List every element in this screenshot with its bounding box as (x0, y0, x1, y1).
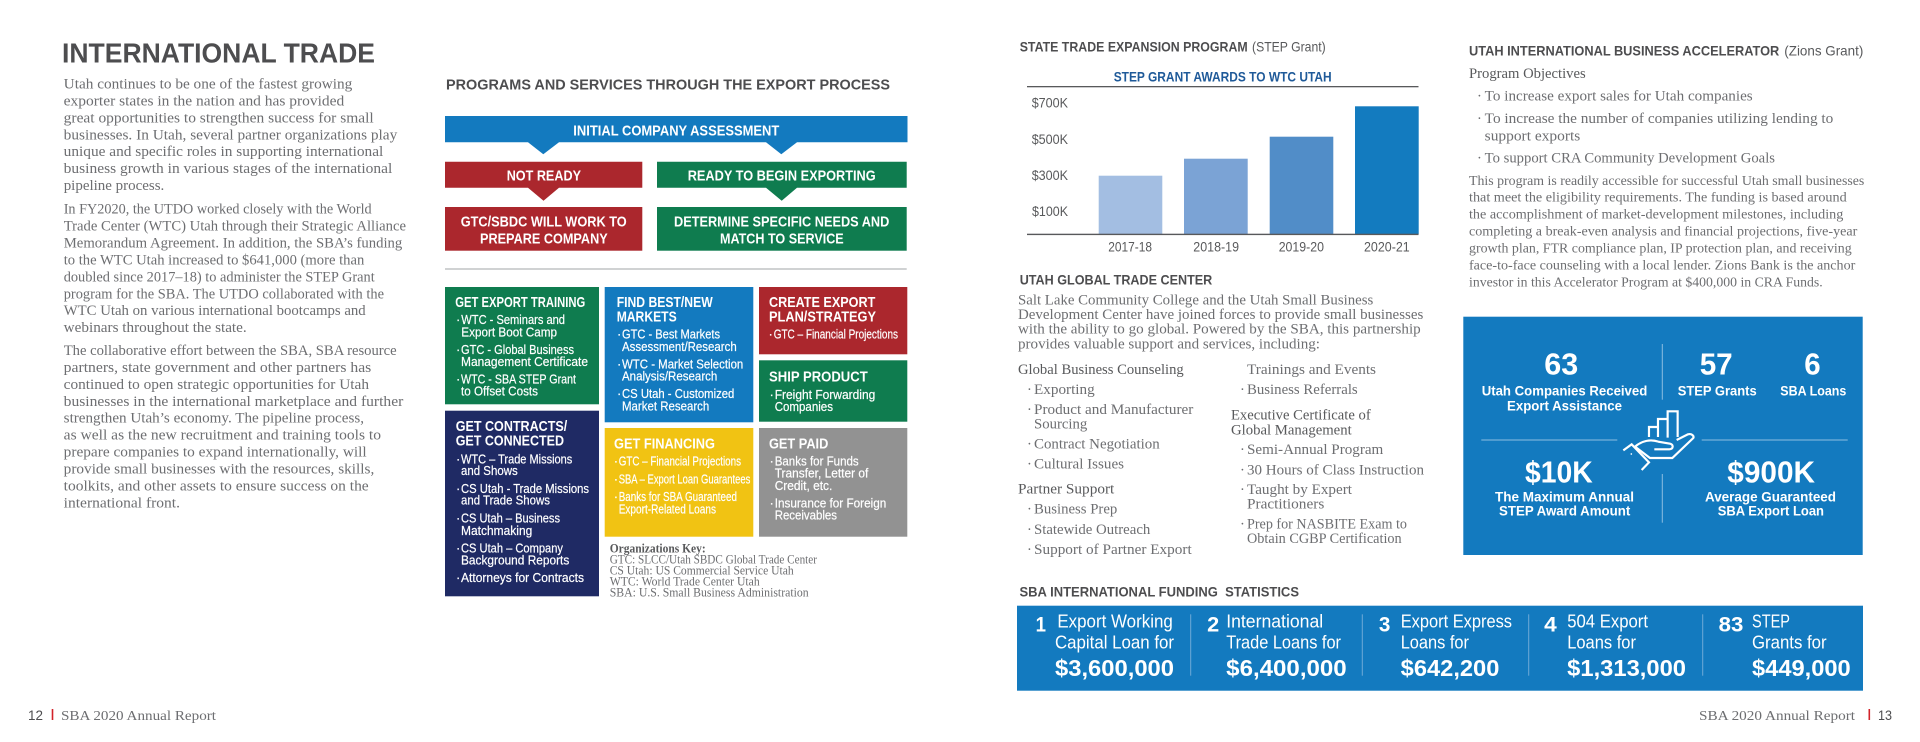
text block: accelerator program description: This program is readily accessible for successful Utah small businesses (1469, 174, 1864, 189)
heading: Utah international business accelerator: UTAH INTERNATIONAL BUSINESS ACCELERATOR (1469, 42, 1779, 58)
panel: get paid: Banks for Funds (775, 454, 859, 469)
list: global business counseling and partner support: · (1027, 542, 1032, 558)
legend: organizations key: CS Utah: US Commercial Service Utah (610, 564, 794, 578)
panel: get contracts / get connected: Attorneys for Contracts (461, 570, 584, 585)
stat: 504 export loans: $1,313,000 (1567, 655, 1686, 681)
panel: ship product (759, 360, 907, 422)
heading: SBA international funding statistics: SBA INTERNATIONAL FUNDING STATISTICS (1020, 584, 1299, 600)
flow step: determine specific needs: DETERMINE SPECIFIC NEEDS AND (674, 214, 889, 231)
stat: international trade loans: 2 (1207, 614, 1219, 637)
stat: 57 STEP grants: 57 (1700, 346, 1733, 381)
footer: left page number: 12 (28, 707, 43, 723)
text block: accelerator program description: face-to-face counseling with a local lender. Zions Bank is the anchor (1469, 259, 1856, 274)
heading: programs and services: PROGRAMS AND SERVICES THROUGH THE EXPORT PROCESS (446, 76, 890, 93)
panel: get contracts / get connected: Background Reports (461, 553, 570, 568)
y axis labels: $300K (1032, 167, 1069, 183)
text block: Utah global trade center intro: with the ability to go global. Powered by the SBA, this partnership (1018, 322, 1421, 338)
y axis labels (1032, 95, 1069, 219)
y axis labels: $500K (1032, 131, 1069, 147)
stat: $900K average loan (1705, 454, 1836, 519)
heading: state trade expansion program: STATE TRADE EXPANSION PROGRAM (1020, 39, 1248, 55)
stat: export working capital loan: $3,600,000 (1055, 655, 1174, 681)
panel: find best/new markets: FIND BEST/NEW (617, 294, 713, 311)
list: trainings and executive certificate (1231, 362, 1425, 547)
panel: create export plan/strategy: PLAN/STRATEGY (769, 309, 876, 326)
panel: get contracts / get connected: CS Utah - Trade Missions (461, 481, 589, 496)
text block: introduction (64, 76, 406, 511)
text block: accelerator program description: completing a break-even analysis and financial projections, five-year (1469, 225, 1858, 240)
panel: find best/new markets: · (617, 386, 621, 401)
text block: introduction: partners, state government and other partners has (64, 360, 371, 376)
panel: get export training: · (456, 372, 460, 387)
stat: 6 SBA loans: SBA Loans (1780, 383, 1846, 399)
text block: Utah global trade center intro: provides valuable support and services, including: (1018, 336, 1320, 352)
stat: export working capital loan: Capital Loan for (1055, 632, 1174, 652)
heading: Utah international business accelerator: (Zions Grant) (1784, 42, 1863, 58)
list: global business counseling and partner support: Partner Support (1018, 482, 1114, 498)
list: trainings and executive certificate: · (1240, 482, 1245, 498)
stat: export working capital loan (1036, 612, 1174, 681)
y axis labels: $700K (1032, 95, 1069, 111)
stat: STEP grants: Grants for (1752, 632, 1827, 652)
stat: $900K average loan: SBA Export Loan (1718, 503, 1824, 519)
panel: get contracts / get connected: · (456, 540, 460, 555)
stat: 57 STEP grants (1678, 346, 1757, 399)
list: trainings and executive certificate: Practitioners (1247, 497, 1325, 513)
text block: introduction: exporter states in the nation and has provided (64, 94, 345, 110)
icon: hand holding bar chart (1623, 411, 1694, 470)
stat: international trade loans: International (1226, 612, 1323, 632)
panel: find best/new markets: CS Utah - Customized (622, 386, 734, 401)
flow step: determine specific needs: MATCH TO SERVICE (720, 231, 844, 248)
stat: international trade loans (1207, 612, 1347, 681)
list: global business counseling and partner support: Cultural Issues (1034, 456, 1124, 472)
text block: introduction: strengthen Utah’s economy. The pipeline process, (64, 411, 364, 427)
list: trainings and executive certificate: Business Referrals (1247, 382, 1358, 398)
panel: find best/new markets: MARKETS (617, 309, 677, 326)
text block: accelerator program description (1469, 174, 1864, 291)
footer: left page number: SBA 2020 Annual Report (61, 709, 216, 724)
flow step: ready to begin exporting: READY TO BEGIN EXPORTING (688, 168, 876, 185)
chart title: STEP GRANT AWARDS TO WTC UTAH (1114, 69, 1332, 85)
list: global business counseling and partner support: · (1027, 456, 1032, 472)
stat: $900K average loan: $900K (1727, 454, 1816, 489)
panel: create export plan/strategy: CREATE EXPORT (769, 294, 875, 311)
panel: get financing: · (614, 489, 618, 504)
panel: get paid: Receivables (775, 508, 837, 523)
stat: export express loans: Loans for (1401, 632, 1469, 652)
list: global business counseling and partner support: · (1027, 402, 1032, 418)
list: trainings and executive certificate: Semi-Annual Program (1247, 442, 1384, 458)
flow step: not ready (445, 162, 642, 201)
x axis labels: 2017-18 (1108, 239, 1152, 255)
stat: international trade loans: Trade Loans for (1226, 632, 1341, 652)
text block: accelerator program description: the accomplishment of market-development milestones, including (1469, 208, 1843, 223)
panel: get export training: GET EXPORT TRAINING (455, 294, 585, 311)
panel: get contracts / get connected: · (456, 570, 460, 585)
panel: get export training: WTC - Seminars and (461, 312, 565, 327)
text block: Utah global trade center intro: Salt Lake Community College and the Utah Small Business (1018, 292, 1374, 308)
panel: get financing: Banks for SBA Guaranteed (619, 489, 737, 504)
list: trainings and executive certificate: Executive Certificate of (1231, 408, 1371, 424)
text block: introduction: prepare companies to expand internationally, will (64, 445, 367, 461)
panel: get financing: GTC – Financial Projections (619, 454, 741, 469)
list: program objectives: To increase the number of companies utilizing lending to (1485, 111, 1833, 127)
panel: create export plan/strategy: GTC – Financial Projections (774, 327, 898, 342)
panel: get financing: SBA – Export Loan Guarantees (619, 472, 751, 487)
list: global business counseling and partner support: · (1027, 502, 1032, 518)
list: trainings and executive certificate: Taught by Expert (1247, 482, 1352, 498)
stat: 6 SBA loans (1780, 346, 1846, 399)
panel: get export training: · (456, 342, 460, 357)
text block: introduction: The collaborative effort between the SBA, SBA resource (64, 343, 397, 359)
stat: STEP grants (1719, 612, 1851, 681)
text block: introduction: doubled since 2017–18) to administer the STEP Grant (64, 269, 375, 285)
x axis labels (1108, 239, 1410, 255)
stat: 504 export loans (1544, 612, 1686, 681)
flow step: ready to begin exporting (657, 162, 907, 201)
text block: introduction: businesses in the international marketplace and further (64, 394, 403, 410)
stat: export express loans: 3 (1379, 614, 1390, 637)
panel: find best/new markets: · (617, 356, 621, 371)
panel: get export training: Export Boot Camp (461, 325, 557, 340)
panel: get financing: Export-Related Loans (619, 501, 716, 516)
list: global business counseling and partner support: Product and Manufacturer (1034, 402, 1193, 418)
list: trainings and executive certificate: · (1240, 462, 1245, 478)
panel: get contracts / get connected: CS Utah – Company (461, 540, 563, 555)
list: program objectives: Program Objectives (1469, 66, 1586, 82)
stat: export working capital loan: Export Working (1057, 612, 1173, 632)
panel: get contracts / get connected: CS Utah – Business (461, 511, 560, 526)
list: program objectives: support exports (1485, 128, 1581, 144)
x axis labels: 2020-21 (1364, 239, 1410, 255)
legend: organizations key: SBA: U.S. Small Business Administration (610, 585, 809, 599)
panel: ship product: Companies (775, 399, 833, 414)
flow step: initial company assessment (445, 116, 908, 154)
stat: 63 companies: Export Assistance (1507, 397, 1622, 413)
flow step: GTC/SBDC will work to prepare company (445, 207, 642, 251)
list: trainings and executive certificate: Prep for NASBITE Exam to (1247, 516, 1407, 532)
x axis labels: 2019-20 (1279, 239, 1324, 255)
stat: STEP grants: STEP (1752, 612, 1790, 632)
list: trainings and executive certificate: · (1240, 442, 1245, 458)
panel: find best/new markets: Analysis/Research (622, 369, 717, 384)
x axis labels: 2018-19 (1193, 239, 1239, 255)
panel: find best/new markets: WTC - Market Selection (622, 356, 743, 371)
footer: right page number: SBA 2020 Annual Report (1699, 709, 1855, 724)
panel: get paid: · (770, 496, 774, 511)
panel: find best/new markets: · (617, 327, 621, 342)
flow step: GTC/SBDC will work to prepare company: GTC/SBDC WILL WORK TO (461, 214, 627, 231)
legend: organizations key (610, 542, 818, 599)
panel: get contracts / get connected: · (456, 451, 460, 466)
panel: get contracts / get connected: · (456, 481, 460, 496)
stat: 63 companies: 63 (1544, 346, 1578, 381)
panel: get financing: GET FINANCING (614, 435, 715, 452)
panel: get export training: WTC - SBA STEP Grant (461, 372, 576, 387)
list: program objectives: · (1477, 151, 1482, 167)
stat: 63 companies: Utah Companies Received (1482, 383, 1647, 399)
panel: get paid: GET PAID (769, 435, 828, 452)
panel: find best/new markets: Assessment/Research (622, 339, 737, 354)
text block: introduction: WTC Utah on various international bootcamps and (64, 303, 366, 319)
list: trainings and executive certificate: Trainings and Events (1247, 362, 1376, 378)
stat: $10K maximum award (1495, 454, 1634, 519)
list: global business counseling and partner support: · (1027, 382, 1032, 398)
text block: accelerator program description: growth plan, FTR compliance plan, IP protection plan, and receiving (1469, 242, 1852, 257)
panel: create export plan/strategy: · (768, 327, 773, 342)
stat: export express loans: Export Express (1401, 612, 1512, 632)
text block: introduction: pipeline process. (64, 178, 164, 194)
bar chart: STEP grant awards to WTC Utah (1027, 69, 1419, 255)
panel: get export training: Management Certificate (461, 354, 588, 369)
footer: right page number (1699, 707, 1892, 724)
list: trainings and executive certificate: Obtain CGBP Certification (1247, 531, 1402, 547)
list: program objectives (1469, 66, 1833, 167)
list: global business counseling and partner support: Support of Partner Export (1034, 542, 1192, 558)
stat: $10K maximum award: STEP Award Amount (1499, 503, 1631, 519)
legend: organizations key: WTC: World Trade Center Utah (610, 574, 760, 588)
footer: right page number: 13 (1878, 707, 1892, 723)
panel: get paid: · (770, 454, 774, 469)
panel: get paid: Insurance for Foreign (775, 496, 886, 511)
flow step: initial company assessment: INITIAL COMPANY ASSESSMENT (573, 123, 779, 140)
panel: get export training: to Offset Costs (461, 384, 538, 399)
list: global business counseling and partner support: Global Business Counseling (1018, 362, 1184, 378)
panel: get paid: Transfer, Letter of (775, 466, 869, 481)
text block: introduction: Trade Center (WTC) Utah through their Strategic Alliance (64, 218, 406, 234)
text block: introduction: great opportunities to strengthen success for small (64, 110, 374, 126)
list: global business counseling and partner support: Business Prep (1034, 502, 1117, 518)
panel: get financing (605, 428, 753, 537)
heading: Utah global trade center: UTAH GLOBAL TRADE CENTER (1020, 272, 1212, 288)
list: global business counseling and partner support (1018, 362, 1193, 558)
text block: introduction: international front. (64, 495, 180, 511)
text block: introduction: business growth in various stages of the international (64, 161, 392, 177)
stat: international trade loans: $6,400,000 (1226, 655, 1347, 681)
panel: get contracts / get connected: Matchmaking (461, 523, 532, 538)
stat: STEP grants: 83 (1719, 614, 1743, 637)
text block: accelerator program description: investor in this Accelerator Program at $400,000 in CRA Funds. (1469, 276, 1823, 291)
stat: 504 export loans: 4 (1544, 614, 1557, 637)
flow step: GTC/SBDC will work to prepare company: PREPARE COMPANY (480, 231, 608, 248)
title: INTERNATIONAL TRADE (62, 38, 375, 68)
list: trainings and executive certificate: Global Management (1231, 422, 1352, 438)
flow step: determine specific needs (657, 207, 907, 251)
list: global business counseling and partner support: Exporting (1034, 382, 1095, 398)
text block: introduction: as well as the new recruitment and training tools to (64, 428, 381, 444)
text block: introduction: webinars throughout the state. (64, 320, 247, 336)
panel: get contracts / get connected: GET CONNECTED (456, 432, 564, 449)
stat: $10K maximum award: The Maximum Annual (1495, 489, 1634, 505)
list: trainings and executive certificate: · (1240, 382, 1245, 398)
flow step: not ready: NOT READY (507, 168, 581, 185)
text block: introduction: Memorandum Agreement. In addition, the SBA’s funding (64, 235, 403, 251)
panel: get export training: · (456, 312, 460, 327)
stat: export express loans (1379, 612, 1512, 681)
text block: introduction: unique and specific roles in supporting international (64, 144, 383, 160)
panel: get contracts / get connected (445, 411, 599, 596)
text block: introduction: program for the SBA. The UTDO collaborated with the (64, 286, 384, 302)
panel: find best/new markets: GTC - Best Markets (622, 327, 720, 342)
list: program objectives: · (1477, 89, 1482, 105)
stat: $900K average loan: Average Guaranteed (1705, 489, 1836, 505)
list: trainings and executive certificate: · (1240, 516, 1245, 532)
text block: introduction: toolkits, and other assets to ensure success on the (64, 478, 369, 494)
stat: STEP grants: $449,000 (1752, 655, 1851, 681)
panel: get contracts / get connected: and Trade Shows (461, 493, 550, 508)
text block: introduction: to the WTC Utah increased to $641,000 (more than (64, 252, 365, 268)
list: program objectives: To support CRA Community Development Goals (1485, 151, 1775, 167)
stat: export express loans: $642,200 (1401, 655, 1499, 681)
list: global business counseling and partner support: · (1027, 522, 1032, 538)
panel: get contracts / get connected: WTC – Trade Missions (461, 451, 573, 466)
stat: 504 export loans: Loans for (1567, 632, 1636, 652)
panel: get financing: · (614, 472, 618, 487)
legend: organizations key: GTC: SLCC/Utah SBDC Global Trade Center (610, 553, 818, 567)
list: global business counseling and partner support: Sourcing (1034, 417, 1087, 433)
panel: get contracts / get connected: GET CONTRACTS/ (456, 418, 568, 435)
panel: ship product: · (770, 387, 774, 402)
panel: get contracts / get connected: and Shows (461, 463, 518, 478)
text block: accelerator program description: that meet the eligibility requirements. The funding is based around (1469, 191, 1847, 206)
list: global business counseling and partner support: Statewide Outreach (1034, 522, 1151, 538)
panel: ship product: Freight Forwarding (775, 387, 875, 402)
panel: create export plan/strategy (759, 287, 907, 354)
bars (1099, 106, 1419, 234)
stat: 6 SBA loans: 6 (1804, 346, 1821, 381)
panel: find best/new markets (605, 287, 753, 422)
stat: export working capital loan: 1 (1036, 614, 1046, 637)
list: trainings and executive certificate: 30 Hours of Class Instruction (1247, 462, 1425, 478)
legend: organizations key: Organizations Key: (610, 542, 706, 556)
text block: Utah global trade center intro: Development Center have joined forces to provide small businesses (1018, 307, 1424, 323)
panel: find best/new markets: Market Research (622, 398, 709, 413)
footer: left page number (28, 707, 216, 724)
text block: Utah global trade center intro (1018, 292, 1424, 352)
text block: introduction: provide small businesses with the resources, skills, (64, 462, 374, 478)
y axis labels: $100K (1032, 203, 1069, 219)
list: global business counseling and partner support: Contract Negotiation (1034, 437, 1160, 453)
text block: introduction: In FY2020, the UTDO worked closely with the World (64, 202, 372, 218)
stat: 57 STEP grants: STEP Grants (1678, 383, 1757, 399)
list: global business counseling and partner support: · (1027, 437, 1032, 453)
panel: get export training: GTC - Global Business (461, 342, 574, 357)
stat: 63 companies (1482, 346, 1647, 413)
panel: get financing: · (614, 454, 618, 469)
text block: introduction: businesses. In Utah, several partner organizations play (64, 127, 398, 143)
panel: funding statistics (1017, 606, 1863, 691)
panel: get paid: Credit, etc. (775, 478, 832, 493)
panel: key statistics (1463, 317, 1863, 555)
text block: introduction: Utah continues to be one of the fastest growing (64, 76, 353, 92)
list: program objectives: To increase export sales for Utah companies (1485, 89, 1753, 105)
panel: get export training (445, 287, 599, 404)
stat: 504 export loans: 504 Export (1567, 612, 1648, 632)
list: program objectives: · (1477, 111, 1482, 127)
panel: get contracts / get connected: · (456, 511, 460, 526)
stat: $10K maximum award: $10K (1525, 454, 1593, 489)
text block: introduction: continued to open strategic opportunities for Utah (64, 377, 370, 393)
heading: state trade expansion program: (STEP Grant) (1252, 39, 1326, 55)
panel: ship product: SHIP PRODUCT (769, 368, 868, 385)
panel: get paid (759, 428, 907, 537)
